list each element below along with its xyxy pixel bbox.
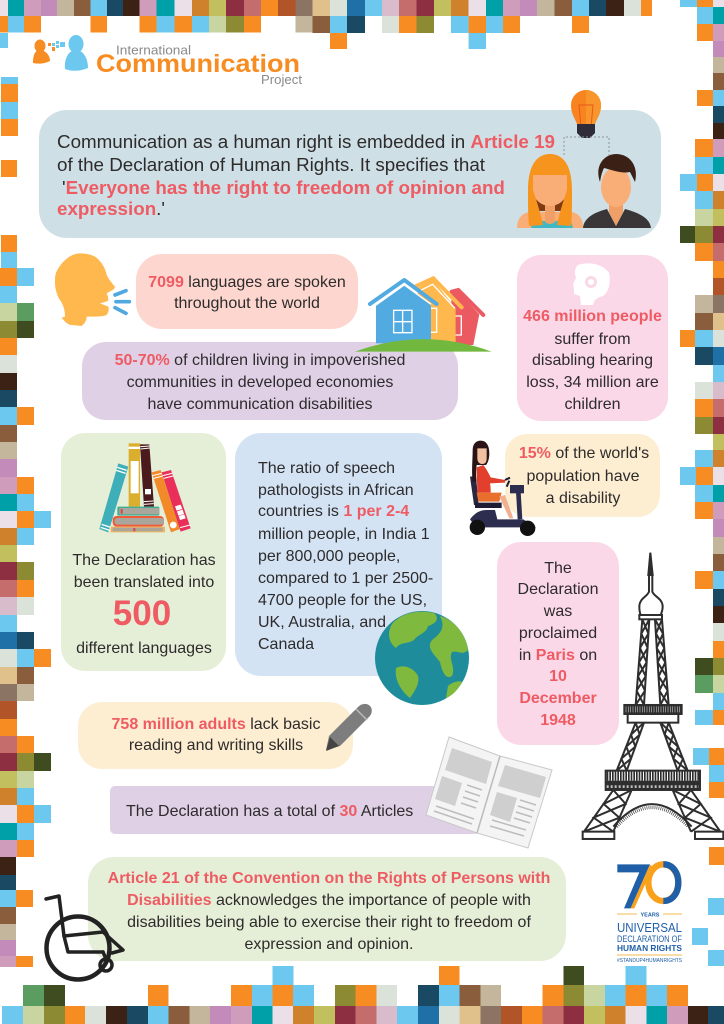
text: languages: 7099 languages are spoken	[148, 274, 346, 291]
text: Paris: 10	[549, 668, 567, 685]
text: ratio: Canada	[258, 636, 314, 653]
icon: books	[99, 443, 191, 532]
text: disability: a disability	[546, 490, 620, 507]
icon: head with ear	[573, 263, 610, 305]
text: ratio: compared to 1 per 2500-	[258, 570, 433, 587]
intro text: Communication as a human right is embedded in Article 19	[57, 131, 555, 152]
text: languages: throughout the world	[174, 295, 320, 312]
text: Paris: in Paris on	[519, 647, 597, 664]
text: translation: been translated into	[74, 574, 214, 591]
logo word: International: International	[116, 42, 191, 58]
panel: Article 21	[88, 857, 566, 961]
decorative rule	[617, 914, 682, 955]
icon: speaking head	[55, 253, 129, 326]
panel: speech pathologists	[235, 433, 442, 676]
panel: 7099 languages	[136, 254, 358, 329]
text: Article 21: disabilities being able to exercise their right to freedom of	[127, 914, 531, 931]
text: ratio: million people, in India 1	[258, 526, 430, 543]
icon: newspaper	[426, 737, 552, 848]
logo word: Project: Project	[261, 72, 302, 87]
text: ratio: countries is 1 per 2-4	[258, 503, 409, 520]
panel: 30 articles	[110, 786, 480, 834]
icon: woman	[517, 154, 583, 228]
text: hearing: disabling hearing	[532, 352, 653, 369]
text: 30 articles: The Declaration has a total of 30 Articles	[126, 803, 413, 820]
text: ratio: pathologists in African	[258, 482, 414, 499]
panel: article 19 intro	[39, 90, 661, 238]
icon: globe	[375, 611, 469, 705]
dotted connector	[564, 137, 609, 155]
icon: Eiffel tower	[583, 553, 723, 839]
big number 500: 500	[113, 594, 171, 633]
icon: pencil	[326, 704, 372, 751]
icon: orange person	[33, 40, 50, 64]
logo: International Communication Project	[33, 35, 302, 87]
text: disability: population have	[527, 468, 640, 485]
text: ratio: The ratio of speech	[258, 460, 395, 477]
logo caption: years: YEARS	[641, 912, 660, 918]
mosaic border: bottom	[2, 966, 724, 1024]
logo numeral 70	[617, 864, 678, 908]
text: Article 21: expression and opinion.	[244, 936, 414, 953]
panel: hearing loss	[517, 255, 668, 421]
logo word: Communication: Communication	[96, 50, 300, 78]
logo caption: hashtag: #STANDUP4HUMANRIGHTS	[617, 958, 683, 964]
text: children: communities in developed economies	[127, 374, 393, 391]
text: Paris: The	[544, 560, 572, 577]
icon: woman on mobility scooter	[470, 441, 536, 536]
text: Paris: proclaimed	[519, 625, 597, 642]
text: ratio: per 800,000 people,	[258, 548, 400, 565]
icon: man	[583, 154, 651, 228]
intro text: of the Declaration of Human Rights. It specifies that	[57, 154, 486, 175]
mosaic border: top	[0, 0, 652, 49]
text: hearing: children	[564, 396, 621, 413]
mosaic border: right	[680, 0, 724, 966]
icon: houses	[355, 278, 492, 352]
icon: speech pixels	[48, 41, 65, 51]
text: children: have communication disabilities	[148, 396, 372, 413]
text: Paris: Declaration	[518, 581, 598, 598]
intro text: 'Everyone has the right to freedom of opinion and	[62, 177, 505, 198]
text: literacy: reading and writing skills	[129, 737, 303, 754]
text: Paris: was	[543, 603, 572, 620]
text: hearing: 466 million people	[523, 308, 662, 325]
panel: 50-70% children	[82, 342, 458, 420]
intro text: expression.'	[57, 198, 165, 219]
panel: 758 million adults	[78, 702, 353, 769]
text: Article 21: Disabilities acknowledges the importance of people with	[127, 892, 531, 909]
text: translation: The Declaration has	[72, 552, 216, 569]
logo caption: human rights: HUMAN RIGHTS	[617, 943, 682, 953]
logo caption: declaration of: DECLARATION OF	[617, 934, 682, 944]
icon: wheelchair	[46, 896, 123, 980]
text: ratio: 4700 people for the US,	[258, 592, 427, 609]
text: Paris: 1948	[540, 712, 576, 729]
logo: 70 years UDHR	[617, 864, 683, 964]
text: Paris: December	[519, 690, 597, 707]
mosaic border: left	[0, 77, 51, 967]
text: Article 21: Article 21 of the Convention on the Rights of Persons with	[108, 870, 550, 887]
panel: declaration in Paris	[497, 542, 619, 745]
text: ratio: UK, Australia, and	[258, 614, 386, 631]
text: disability: 15% of the world's	[519, 445, 649, 462]
logo caption: universal: UNIVERSAL	[617, 921, 682, 935]
panel: 15% disability	[505, 434, 660, 517]
panel: 500 languages	[61, 433, 226, 671]
text: languages: different languages	[76, 640, 212, 657]
text: hearing: suffer from	[554, 331, 631, 348]
text: hearing: loss, 34 million are	[526, 374, 659, 391]
icon: light bulb	[571, 90, 601, 138]
text: literacy: 758 million adults lack basic	[112, 716, 320, 733]
icon: blue person	[65, 35, 88, 71]
text: children: 50-70% of children living in impoverished	[115, 352, 405, 369]
